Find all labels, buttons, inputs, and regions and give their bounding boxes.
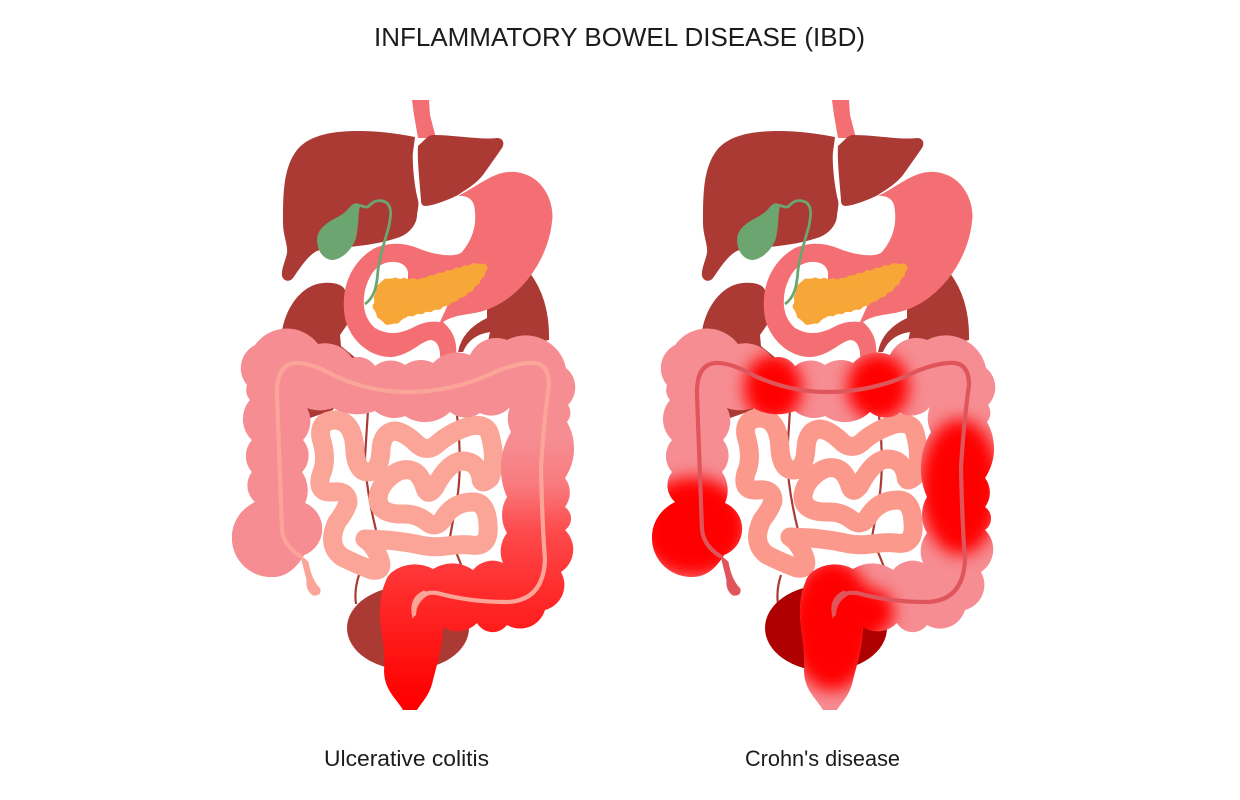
- mesentery vessels: [777, 410, 886, 604]
- small intestine: [320, 420, 494, 570]
- label: ulcerative colitis: Ulcerative colitis: [324, 746, 489, 771]
- label: Crohn's disease: Crohn's disease: [745, 746, 900, 771]
- colon with inflamed descending section: [220, 328, 575, 710]
- small intestine: [745, 418, 918, 568]
- panel: ulcerative colitis digestive system: [220, 100, 575, 710]
- panel: Crohn's disease digestive system: [639, 100, 1000, 710]
- title: INFLAMMATORY BOWEL DISEASE (IBD): [374, 22, 865, 52]
- colon lumen and appendix: [697, 363, 969, 618]
- upper organs: esophagus, liver, gallbladder, stomach, pancreas, kidneys: [702, 100, 973, 418]
- colon lumen and appendix: [277, 363, 549, 618]
- bladder: [765, 585, 887, 671]
- bladder: [347, 586, 469, 670]
- colon with patchy inflammation: [639, 328, 1000, 710]
- mesentery vessels: [355, 410, 464, 604]
- upper organs: esophagus, liver, gallbladder, stomach, pancreas, kidneys: [282, 100, 553, 418]
